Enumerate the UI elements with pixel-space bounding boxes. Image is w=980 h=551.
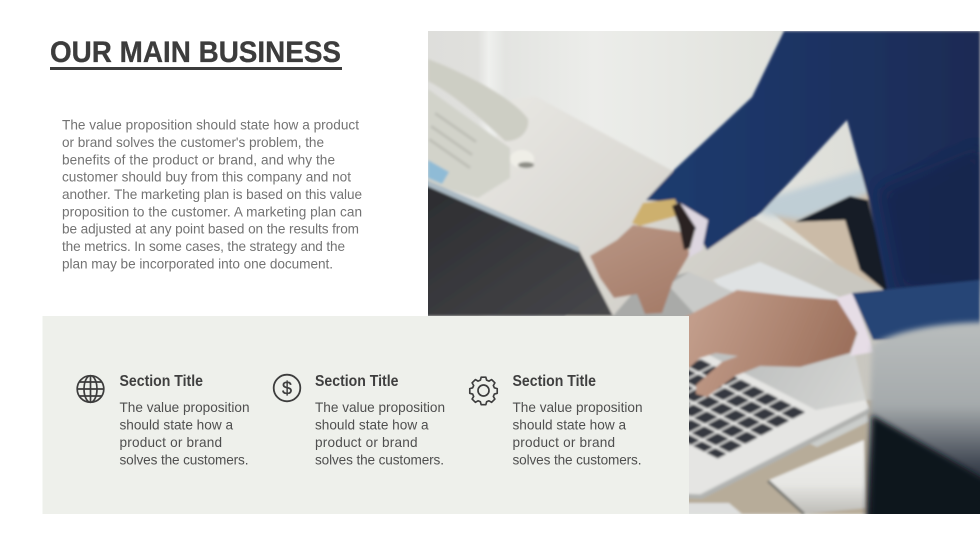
papers and tray [714, 262, 838, 301]
floor and chair behind desk [776, 192, 883, 288]
title: OUR MAIN BUSINESS [50, 36, 341, 69]
heading: section title 1: Section Title [120, 373, 203, 390]
keyboard [689, 358, 806, 460]
intro paragraph: benefits of the product or brand, and why the [62, 152, 335, 167]
desk surface [482, 110, 886, 400]
right hand [670, 290, 857, 397]
blurred foreground object [866, 322, 980, 530]
tablet [769, 440, 866, 514]
text block: section 2: should state how a [315, 417, 429, 432]
text block: section 1 [120, 400, 250, 467]
heading: section title 2: Section Title [315, 373, 399, 390]
icon: globe [77, 376, 104, 402]
laptop lid [420, 183, 613, 316]
laptop base [690, 353, 866, 496]
intro paragraph: be adjusted at any point based on the results from [62, 222, 359, 237]
cuff [680, 203, 708, 258]
panel: section background [42, 316, 689, 514]
intro paragraph: customer should buy from this company and not [62, 170, 351, 185]
section 1: globe [77, 373, 250, 467]
photo: businessman working at a laptop [420, 31, 980, 530]
icon: gear [470, 377, 497, 405]
text block: section 1: product or brand [120, 435, 222, 450]
sweater [646, 31, 980, 300]
section 3: gear [470, 373, 642, 467]
icon: dollar coin: $ [282, 378, 292, 398]
text block: section 3: should state how a [512, 417, 626, 432]
text block: section 2: solves the customers. [315, 452, 444, 467]
section 2: dollar [274, 373, 445, 467]
intro paragraph: plan may be incorporated into one document. [62, 256, 333, 271]
text block: section 2: product or brand [315, 435, 418, 450]
intro paragraph: another. The marketing plan is based on this value [62, 187, 362, 202]
heading: section title 3: Section Title [512, 373, 596, 390]
text block: section 3 [512, 400, 642, 467]
text block: section 2 [315, 400, 445, 467]
text block: section 2: The value proposition [315, 400, 445, 415]
left hand [590, 225, 689, 314]
right cuff and sleeve [836, 293, 874, 356]
text block: section 3: product or brand [512, 435, 615, 450]
icon: dollar coin [274, 375, 300, 401]
intro paragraph: the metrics. In some cases, the strategy and the [62, 239, 345, 254]
text block: section 1: should state how a [120, 417, 233, 432]
text block: section 3: The value proposition [512, 400, 642, 415]
intro paragraph: The value proposition should state how a product [62, 118, 359, 132]
intro paragraph [62, 118, 362, 271]
text block: section 1: The value proposition [120, 400, 250, 415]
text block: section 1: solves the customers. [120, 452, 248, 467]
intro paragraph: proposition to the customer. A marketing plan can [62, 204, 362, 219]
intro paragraph: or brand solves the customer's problem, the [62, 135, 324, 150]
text block: section 3: solves the customers. [512, 452, 642, 467]
phone [428, 89, 510, 198]
watch [632, 199, 680, 226]
